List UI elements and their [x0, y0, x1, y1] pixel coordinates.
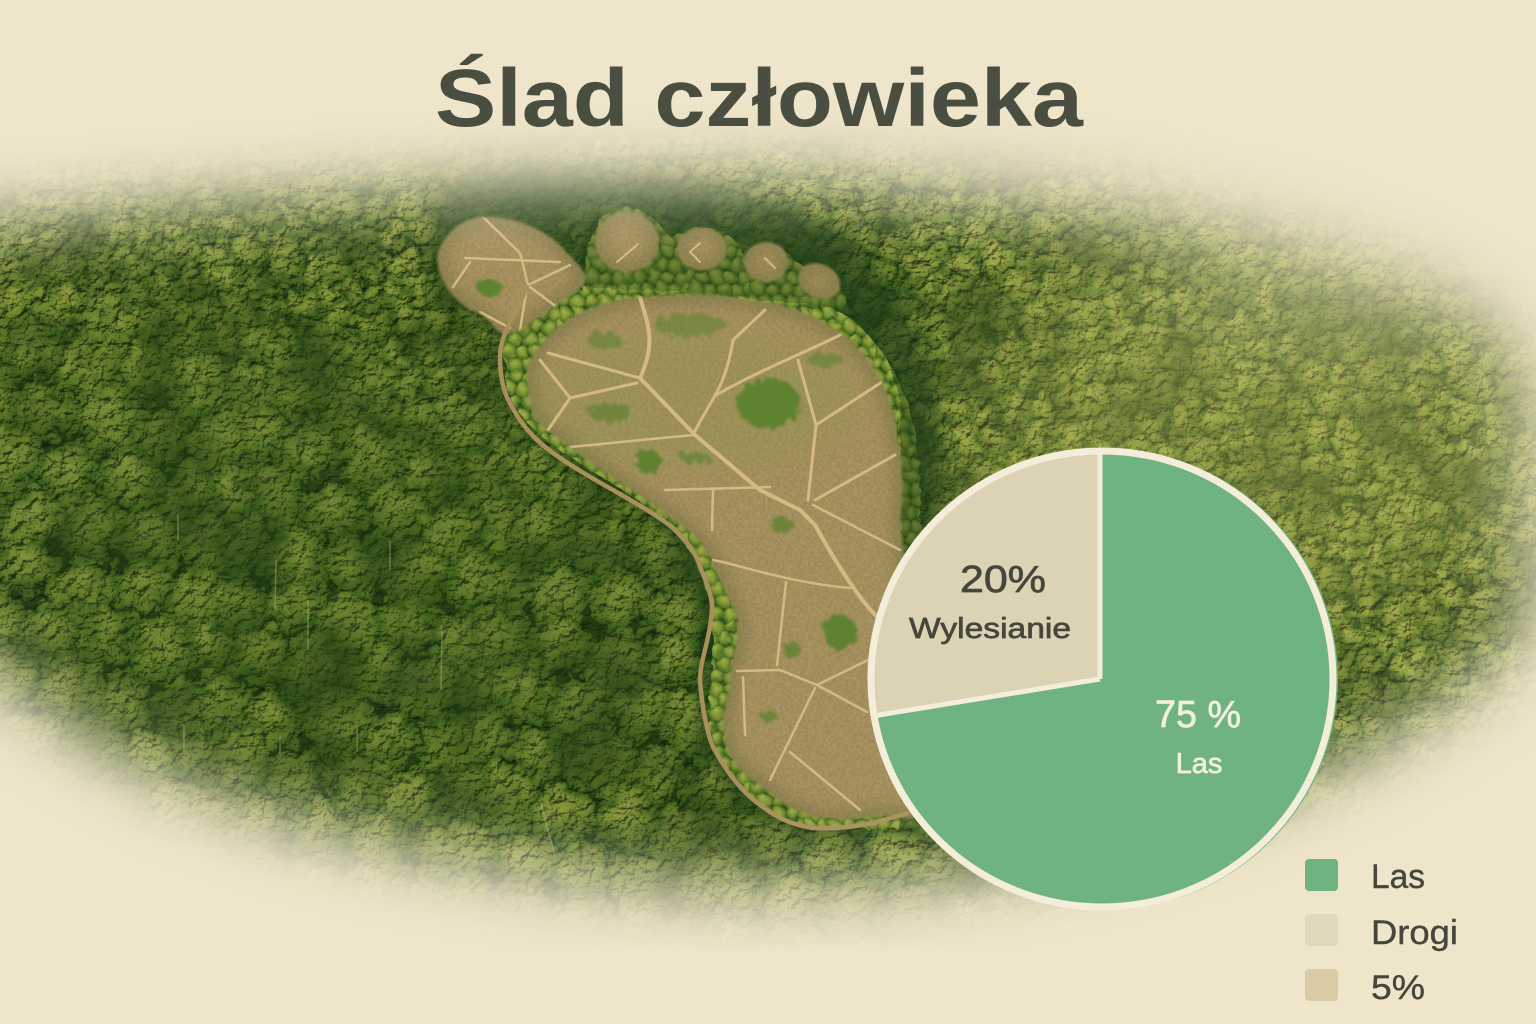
footprint shadow rim: [428, 162, 943, 835]
pie slice: forest 75%: [873, 448, 1338, 910]
legend item: 5%: [1305, 969, 1425, 1007]
pie slice: deforestation 20%: [870, 448, 1100, 716]
label: 75 % Las: [1155, 694, 1241, 780]
legend item: 5%: 5%: [1371, 969, 1425, 1007]
label: 20% Wylesianie: Wylesianie: [909, 613, 1071, 645]
legend item: Drogi: [1305, 914, 1458, 952]
footprint hedge band: [503, 208, 925, 830]
pie dividers and rim: [871, 449, 1333, 907]
title: Ślad człowieka: [435, 53, 1085, 144]
outer dirt path around the foot: [500, 287, 907, 828]
footprint clearing: heel, sole and toes: [436, 211, 916, 820]
label: 75 % Las: Las: [1176, 748, 1222, 780]
legend: [1305, 858, 1458, 1007]
legend item: Las: [1305, 858, 1425, 896]
tree trunks: [178, 515, 556, 860]
label: 20% Wylesianie: 20%: [960, 559, 1046, 601]
dirt roads: [453, 217, 900, 810]
vegetation patches: [476, 281, 857, 722]
pie chart: [870, 448, 1338, 910]
legend item: Las: Las: [1371, 858, 1425, 896]
fog over the right side: [850, 130, 1536, 680]
label: 20% Wylesianie: [909, 559, 1071, 645]
label: 75 % Las: 75 %: [1155, 694, 1241, 736]
legend item: Drogi: Drogi: [1371, 914, 1458, 952]
